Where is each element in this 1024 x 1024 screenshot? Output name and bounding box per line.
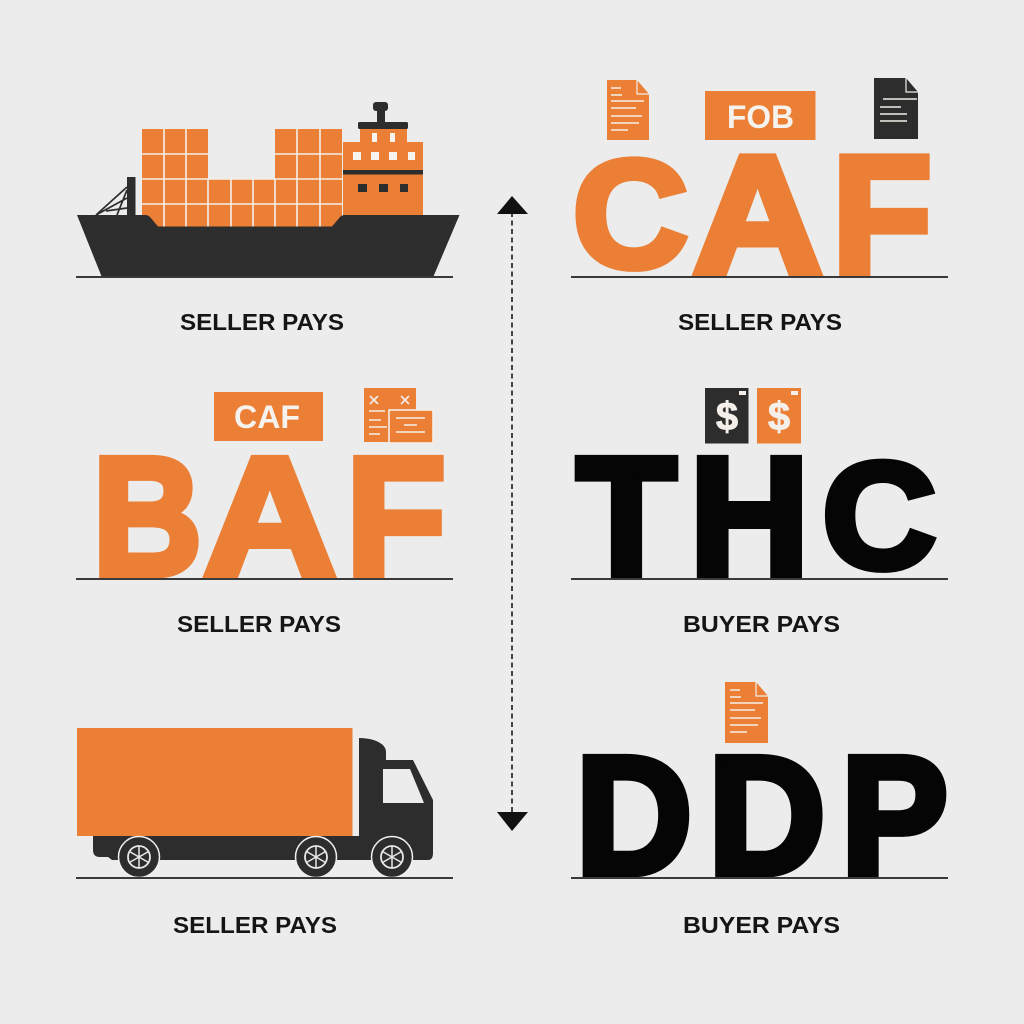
heading: BAF: A	[204, 423, 336, 611]
icon: truck cab and chassis	[93, 738, 433, 860]
icon: ship hull	[77, 215, 460, 278]
heading: DDP: D	[708, 722, 826, 910]
tag: FOB: FOB	[727, 99, 794, 135]
icon: rear wheel	[118, 836, 160, 878]
icon: mast and rigging	[96, 177, 136, 217]
icon: dark document	[874, 78, 918, 139]
heading: CAF: F	[832, 122, 932, 310]
heading: DDP: P	[841, 721, 948, 909]
ground line	[76, 578, 453, 580]
icon: orange dollar card: $	[768, 395, 790, 439]
icon: containers	[142, 129, 342, 228]
tag: FOB	[705, 91, 816, 140]
label: SELLER PAYS	[678, 309, 842, 335]
tag: CAF: CAF	[234, 399, 300, 435]
icon: dark dollar card: $	[716, 395, 738, 439]
ground line	[571, 276, 948, 278]
ground line	[76, 276, 453, 278]
panel: truck	[76, 728, 453, 938]
heading: BAF	[93, 422, 446, 611]
icon: middle wheel	[296, 836, 336, 878]
heading: BAF: F	[346, 423, 446, 611]
heading: DDP	[576, 721, 948, 910]
ground line	[76, 877, 453, 879]
heading: THC: T	[577, 423, 676, 611]
icon: ship bridge	[343, 102, 423, 216]
icon: orange document	[607, 80, 649, 140]
label: SELLER PAYS	[177, 611, 341, 637]
icon: truck window	[383, 769, 424, 803]
panel: BAF	[76, 388, 453, 637]
heading: DDP: D	[576, 721, 692, 909]
label: BUYER PAYS	[683, 912, 840, 938]
panel: container ship	[76, 102, 460, 335]
icon: orange document	[725, 682, 768, 743]
icon: cargo box	[77, 728, 352, 836]
panel: CAF	[571, 78, 948, 335]
arrow: vertical double-headed dashed	[497, 196, 528, 831]
label: BUYER PAYS	[683, 611, 840, 637]
panel: DDP	[571, 682, 948, 938]
ground line	[571, 877, 948, 879]
heading: CAF: A	[693, 121, 823, 309]
heading: BAF: B	[93, 422, 202, 610]
label: SELLER PAYS	[173, 912, 337, 938]
icon: dark dollar card	[705, 388, 748, 444]
heading: CAF	[573, 121, 932, 310]
icon: orange dollar card	[757, 388, 801, 444]
tag: CAF	[214, 392, 323, 441]
heading: THC	[577, 423, 936, 611]
heading: THC: C	[822, 431, 936, 600]
heading: CAF: C	[573, 130, 688, 300]
heading: THC: H	[690, 423, 809, 611]
label: SELLER PAYS	[180, 309, 344, 335]
icon: front wheel	[372, 836, 412, 878]
ground line	[571, 578, 948, 580]
icon: documents	[364, 388, 433, 443]
panel: THC	[571, 388, 948, 637]
